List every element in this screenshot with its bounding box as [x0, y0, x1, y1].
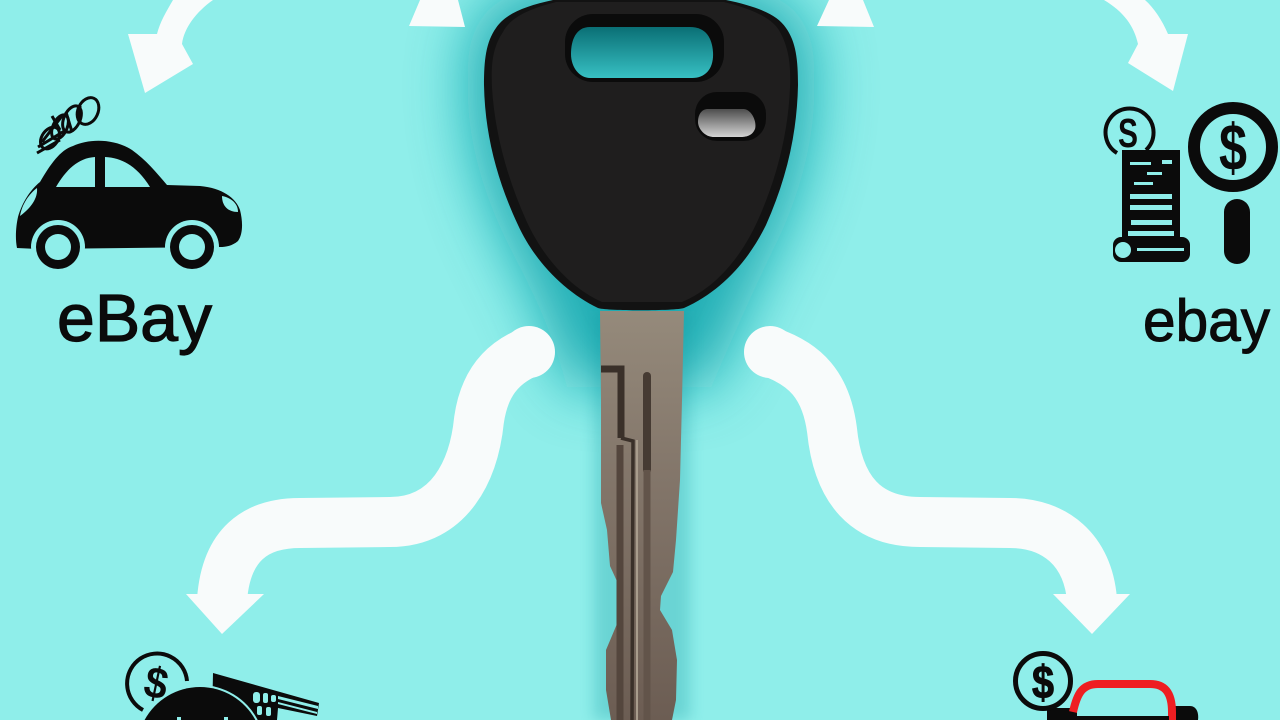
icon: coin with bank note, bottom left: $ — [140, 657, 173, 710]
arrow: top right — [1104, 0, 1188, 91]
icon: car with smoke — [16, 94, 242, 274]
key shadow on background — [484, 0, 798, 720]
icon: coin with red car, bottom right — [1016, 654, 1198, 720]
coin — [1106, 109, 1154, 156]
icon: coin with red car, bottom right: $ — [1032, 656, 1054, 708]
car body — [16, 141, 242, 249]
arrow: top centre right fragment — [817, 0, 874, 27]
label: ebay right: ebay — [1143, 288, 1270, 354]
key head — [484, 0, 798, 310]
icon: receipt with coin — [1106, 109, 1190, 262]
receipt — [1113, 150, 1190, 262]
icon: magnifier with dollar: $ — [1219, 110, 1247, 184]
arrow: bottom left — [186, 326, 555, 634]
arrow: top left — [128, 0, 213, 93]
arrow: bottom right — [744, 326, 1130, 634]
arrow: top centre left fragment — [409, 0, 465, 27]
key slot — [565, 14, 724, 82]
car wheels — [31, 220, 219, 274]
label: eBay left: eBay — [57, 281, 213, 356]
icon: coin with bank note, bottom left — [127, 654, 319, 720]
smoke scribble — [37, 94, 103, 153]
coin: S — [1118, 110, 1138, 156]
key — [484, 0, 798, 720]
key small hole — [695, 92, 766, 141]
key blade — [600, 311, 684, 720]
key blade grooves — [601, 369, 647, 720]
icon: magnifier with dollar — [1194, 108, 1272, 264]
